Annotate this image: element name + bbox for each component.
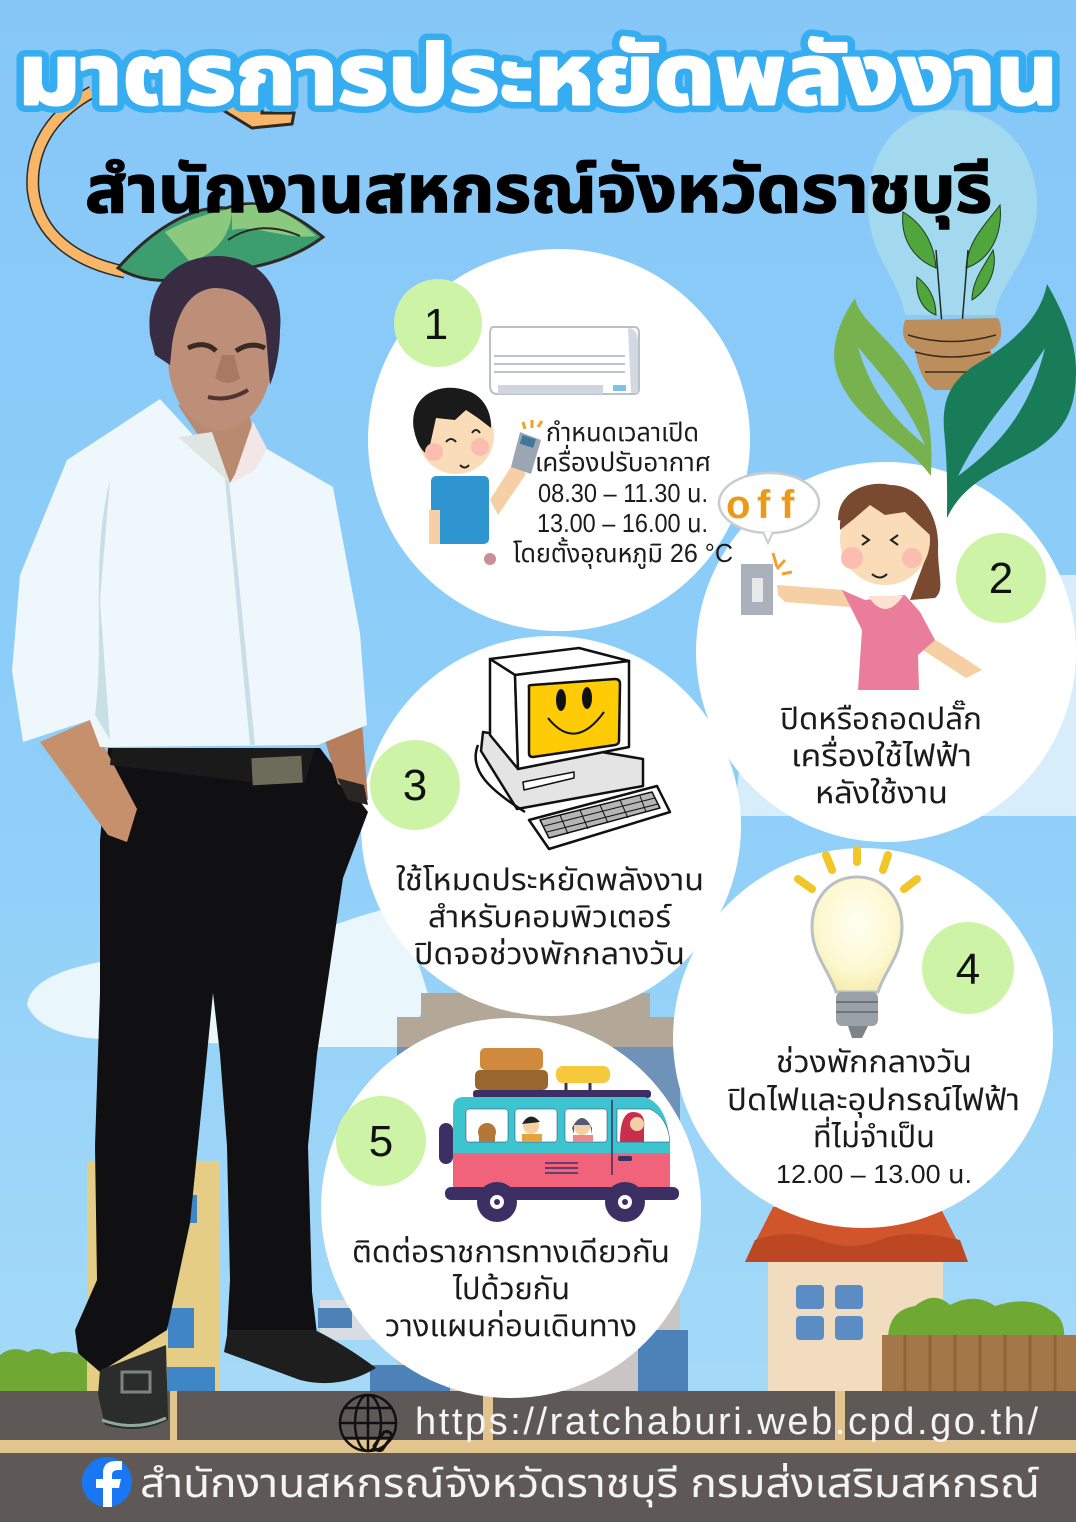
text: travel together advice: ไปด้วยกัน: [452, 1273, 570, 1306]
icon: globe with link: [340, 1395, 396, 1451]
bulb sprout: [903, 205, 1000, 315]
icon: air conditioner: [490, 327, 639, 394]
background: pale cloud band right: [735, 575, 1076, 816]
number badge 4: [922, 922, 1014, 1014]
number badge 1: 1: [424, 300, 448, 349]
text: lunch break lights off: ช่วงพักกลางวัน: [776, 1046, 972, 1079]
text: air conditioner schedule: กำหนดเวลาเปิด: [546, 417, 699, 447]
number badge 1: [394, 279, 482, 367]
icon: woman pointing: [777, 484, 982, 690]
number badge 3: [370, 740, 460, 830]
text: lunch break lights off: 12.00 – 13.00 น.: [776, 1159, 972, 1189]
illustration: large green leaves: [834, 284, 1076, 518]
panel 2: switch off appliances: [696, 462, 1076, 842]
number badge 3: 3: [403, 761, 427, 810]
illustration: plug and leaves: [33, 80, 323, 280]
text: lunch break lights off: ที่ไม่จำเป็น: [813, 1116, 935, 1154]
building: grey tower: [318, 993, 688, 1391]
icon: facebook: [82, 1457, 132, 1507]
icon: bus with passengers: [439, 1048, 679, 1222]
text: travel together advice: ติดต่อราชการทางเดียวกัน: [352, 1236, 670, 1269]
icon: off speech bubble: off: [726, 483, 795, 527]
right leaf: [944, 284, 1076, 518]
man: right forearm: [325, 722, 368, 800]
illustration: light bulb with plant: [868, 110, 1037, 390]
text: computer energy saving: ปิดจอช่วงพักกลางวัน: [414, 938, 685, 971]
man: neck and collar: [178, 395, 267, 483]
man: white shirt: [12, 399, 367, 747]
icon: light bulb: [798, 850, 917, 1038]
panel 1: air conditioner timing: [368, 249, 750, 631]
plant pot: [903, 318, 1001, 390]
number badge 2: 2: [989, 554, 1013, 603]
panel 4: lights off at lunch: [673, 848, 1053, 1228]
man: belt and buckle: [110, 748, 315, 785]
background: city street scene: [0, 993, 1076, 1522]
number badge 5: 5: [369, 1117, 393, 1166]
number badge 4: 4: [956, 945, 980, 994]
text: unplug appliances: เครื่องใช้ไฟฟ้า: [791, 735, 972, 773]
panel 5: travel together: [321, 1018, 701, 1398]
text: unplug appliances: หลังใช้งาน: [815, 777, 948, 810]
text: computer energy saving: สำหรับคอมพิวเตอร์: [428, 901, 673, 934]
road: [0, 1391, 1076, 1522]
man: right shoe: [224, 1330, 376, 1383]
text: air conditioner schedule: เครื่องปรับอากาศ: [535, 444, 711, 477]
website url: https://ratchaburi.web.cpd.go.th/: [415, 1401, 1038, 1443]
house: [745, 1207, 968, 1391]
building: yellow block: [87, 1161, 220, 1391]
text: unplug appliances: ปิดหรือถอดปลั๊ก: [780, 700, 982, 736]
text: air conditioner schedule: [513, 417, 733, 569]
man: left forearm: [40, 720, 137, 842]
subtitle: สำนักงานสหกรณ์จังหวัดราชบุรี: [85, 152, 992, 229]
bulb glass: [868, 110, 1037, 315]
text: lunch break lights off: [727, 1046, 1020, 1189]
text: computer energy saving: [396, 864, 704, 971]
left leaf: [834, 298, 931, 476]
text: air conditioner schedule: โดยตั้งอุณหภูมิ 26 °C: [513, 536, 733, 569]
text: travel together advice: [352, 1236, 670, 1343]
text: unplug appliances: [780, 700, 982, 810]
man: trousers: [75, 748, 368, 1372]
man: shirt shading: [95, 470, 255, 745]
facebook page name: สำนักงานสหกรณ์จังหวัดราชบุรี กรมส่งเสริมสหกรณ์: [140, 1462, 1040, 1507]
text: travel together advice: วางแผนก่อนเดินทาง: [385, 1310, 637, 1343]
title: มาตรการประหยัดพลังงาน: [18, 28, 1058, 122]
icon: wall switch: [741, 553, 792, 615]
number badge 5: [336, 1096, 426, 1186]
text: air conditioner schedule: 08.30 – 11.30 น.: [538, 478, 708, 508]
text: lunch break lights off: ปิดไฟและอุปกรณ์ไฟฟ้า: [727, 1084, 1020, 1118]
background: cloud left: [27, 905, 430, 1047]
title: มาตรการประหยัดพลังงาน: [18, 28, 1058, 122]
icon: boy with remote: [413, 388, 542, 544]
text: computer energy saving: ใช้โหมดประหยัดพลังงาน: [396, 864, 704, 897]
man: head: [149, 256, 280, 430]
number badge 2: [956, 533, 1046, 623]
text: air conditioner schedule: 13.00 – 16.00 น.: [537, 508, 708, 538]
icon: off speech bubble: [719, 473, 819, 543]
bush and fence right: [882, 1298, 1076, 1391]
man: watch: [337, 778, 368, 805]
bush left: [0, 1349, 87, 1391]
illustration: standing man in white shirt: [12, 256, 376, 1429]
icon: smiling computer: [476, 648, 670, 849]
panel 3: computer power saving: [361, 636, 741, 1016]
man: left shoe: [98, 1345, 168, 1429]
